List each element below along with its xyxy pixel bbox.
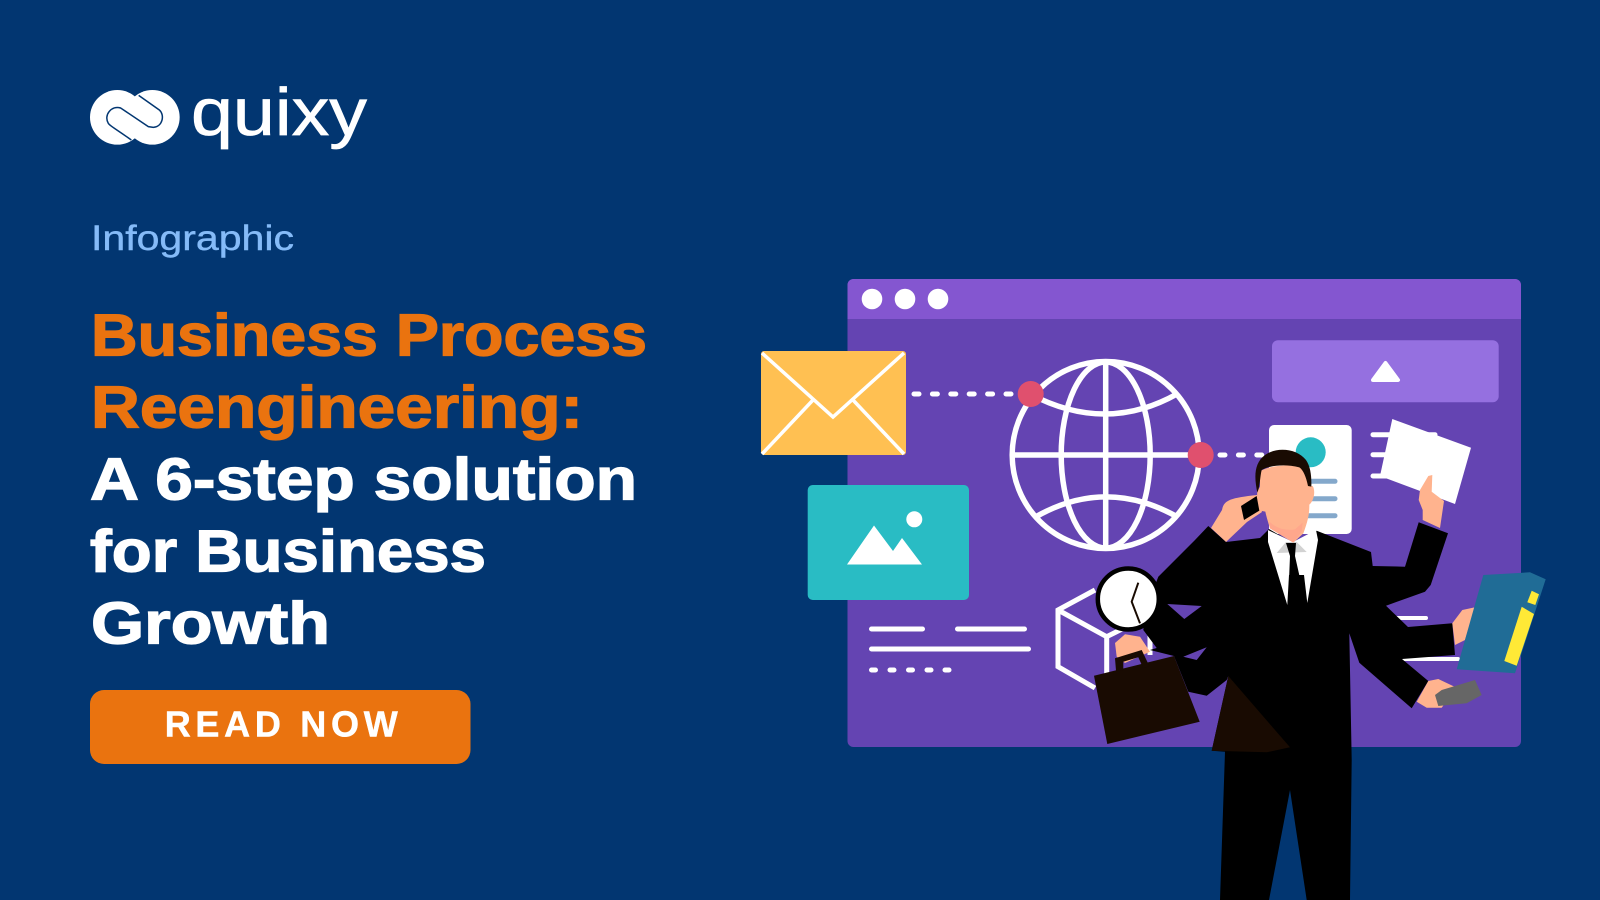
icon: folder [1457,572,1546,673]
businessman figure [1094,450,1546,900]
globe node: upper left [1018,381,1044,407]
icon: infinity mark [90,90,180,145]
category label: Infographic [91,219,294,258]
hand holding phone [1417,679,1457,708]
icon: upload box [1272,340,1499,402]
logo: quixy [90,75,368,150]
panel: browser window [848,279,1521,747]
icon: profile document [1269,425,1352,534]
collar shadow [1277,542,1307,553]
icon: clock [1098,568,1159,630]
suit and trousers [1143,522,1455,900]
button: read now: READ NOW [165,704,398,745]
tie [1286,543,1306,605]
title [90,303,647,656]
title: Business Process [91,303,647,369]
text placeholder lines [872,618,1458,670]
title: Reengineering: [91,374,583,440]
shirt [1268,530,1318,605]
title: Growth [91,590,330,656]
gaps between arms [1167,604,1207,660]
button: read now [90,690,470,764]
icon: image card [808,485,969,600]
globe node: right [1188,442,1214,468]
icon: globe [1012,362,1199,548]
raised hand holding paper [1419,475,1444,528]
icon: envelope [761,351,906,455]
title: for Business [90,519,486,585]
hand holding briefcase [1115,634,1150,663]
head [1241,450,1314,543]
icon: cube [1058,590,1150,688]
jacket flap [1212,676,1290,752]
icon: briefcase [1094,650,1200,744]
hand with phone [1211,495,1262,542]
hand holding folder [1452,606,1481,645]
icon: paper sheet with lines [1373,419,1471,504]
icon: handheld device [1435,680,1482,706]
logo wordmark: quixy [191,75,368,150]
title: A 6-step solution [90,446,637,512]
dotted connector: globe to document [1220,452,1268,458]
illustration: browser window with businessman [761,279,1546,900]
dotted connector: envelope to globe [914,392,1013,396]
